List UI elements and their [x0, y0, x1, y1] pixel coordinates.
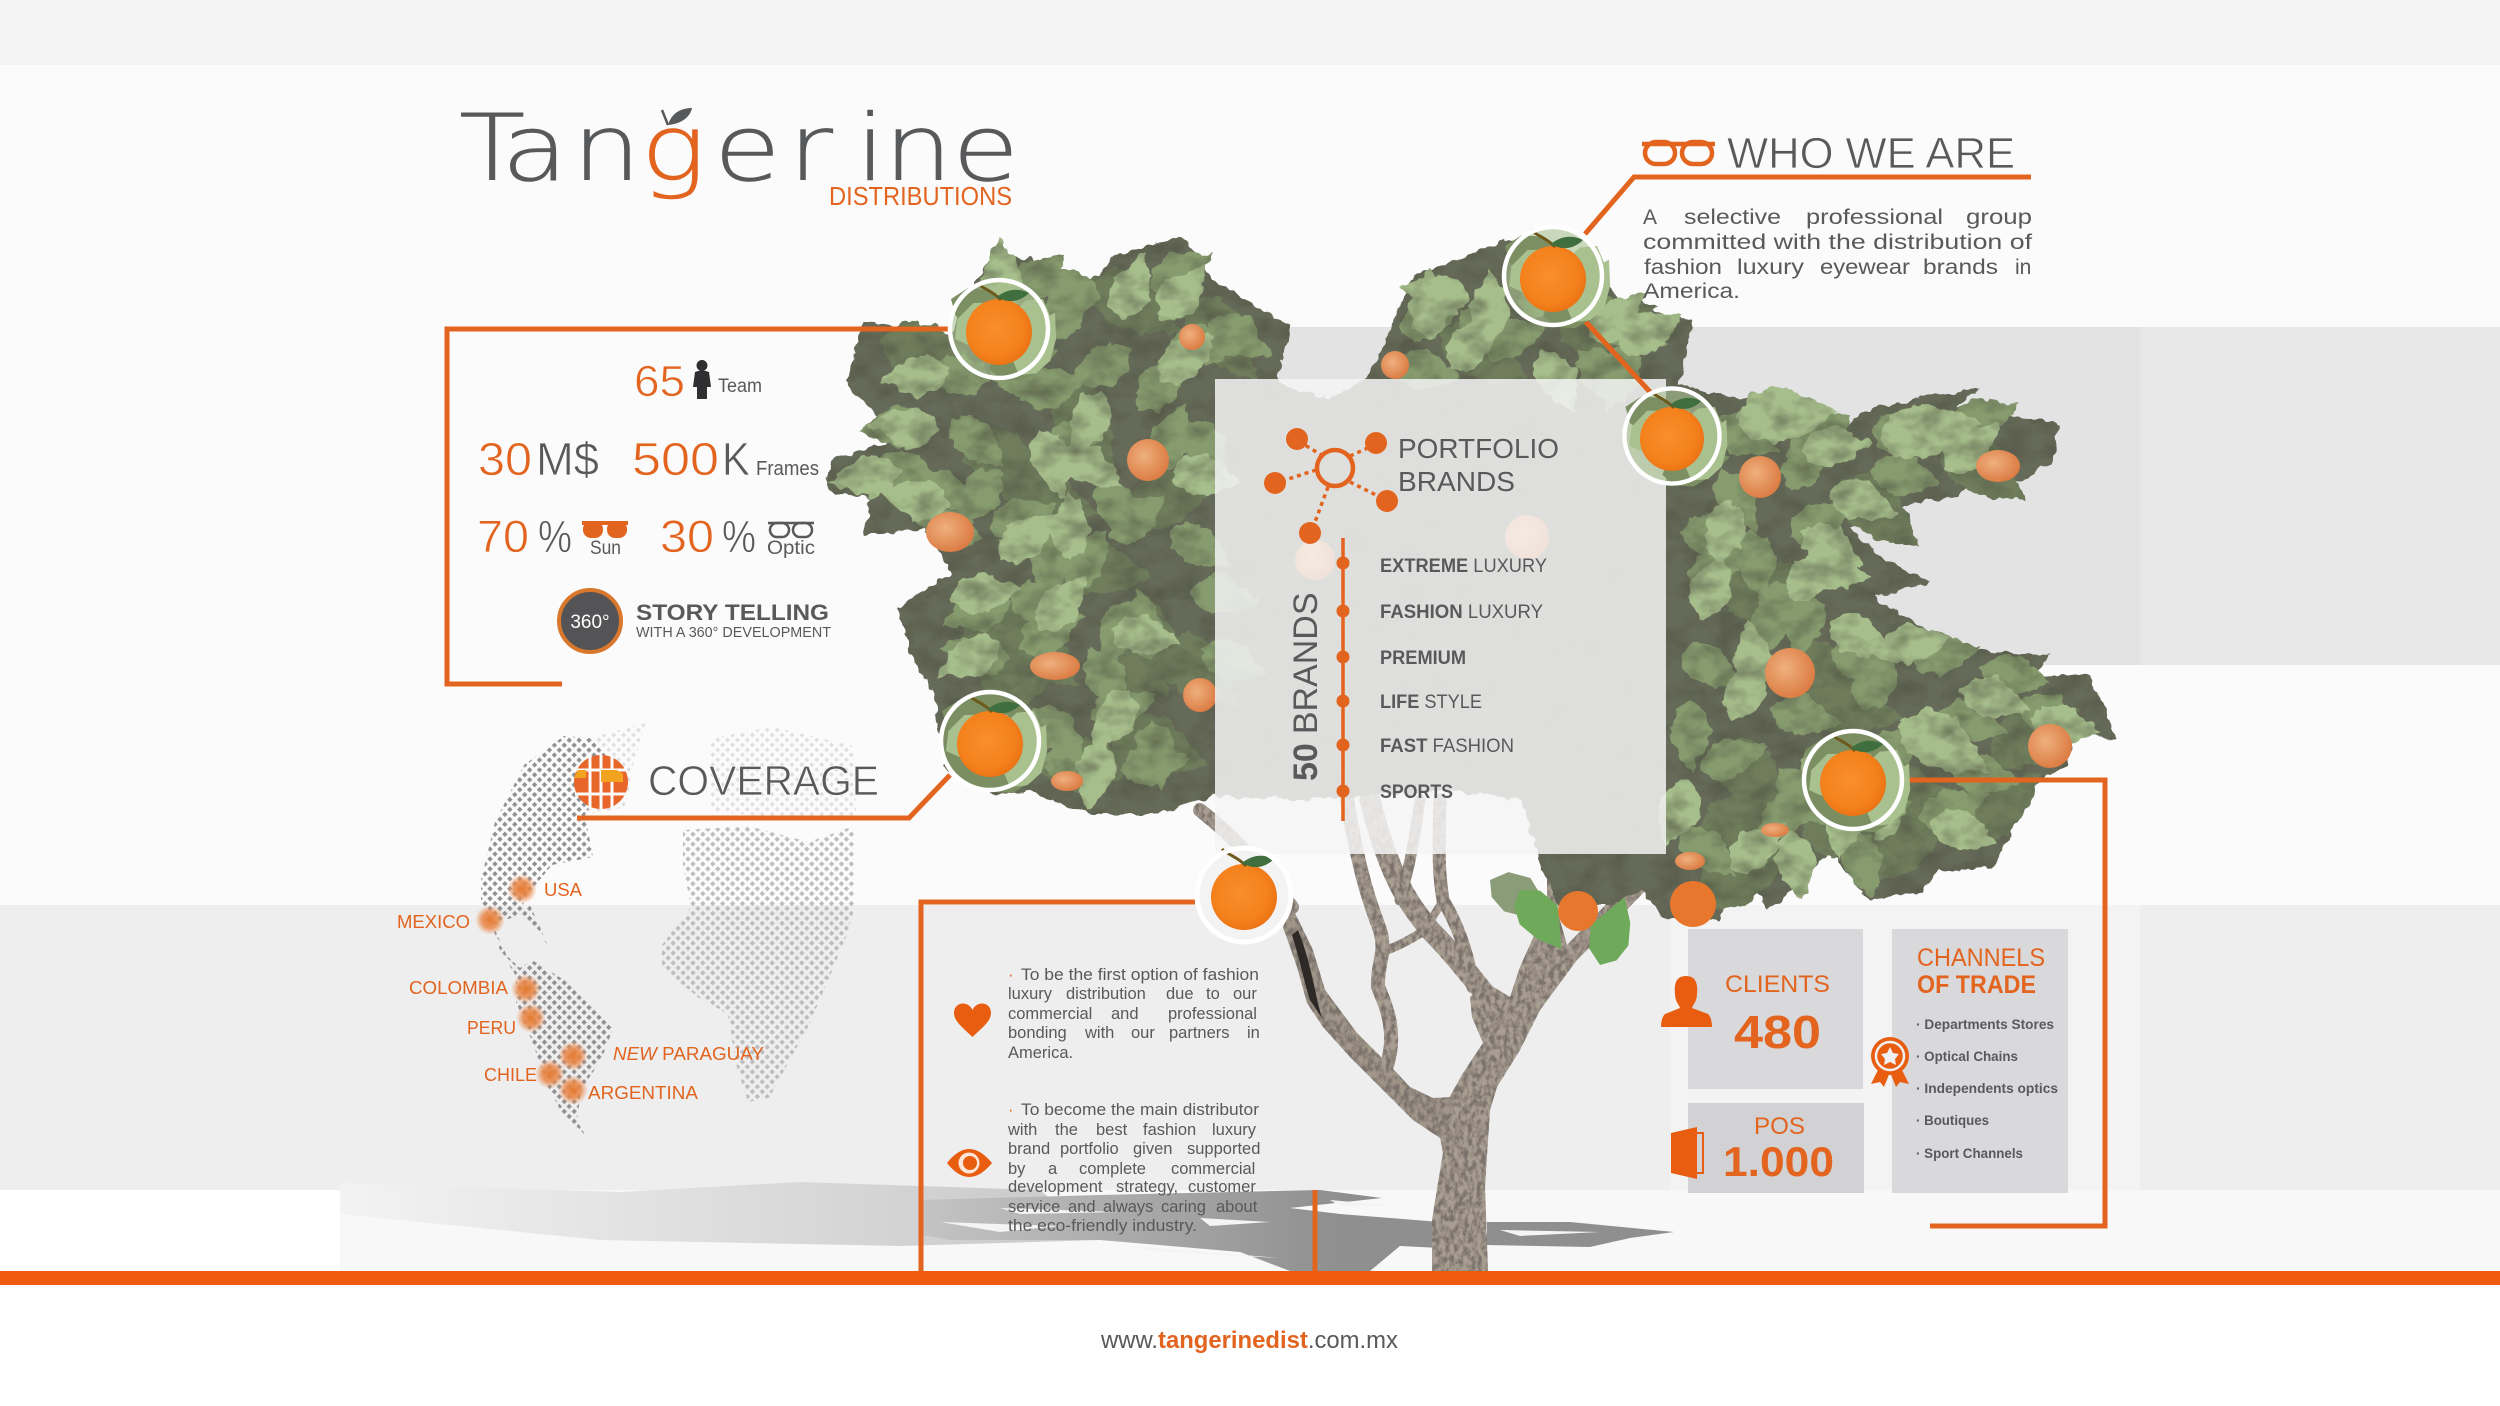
story telling badge: 360° — [570, 612, 610, 633]
icon: eye — [947, 1149, 992, 1177]
country labels: USA — [544, 879, 583, 900]
orange tree illustration — [826, 235, 2117, 1271]
who we are description: group — [1966, 206, 2032, 229]
pos box — [1688, 1103, 1864, 1193]
clients box — [1688, 929, 1863, 1089]
fruit marker: mission — [1197, 848, 1291, 942]
who we are description: America. — [1643, 280, 1740, 303]
vision text: about — [1216, 1198, 1258, 1216]
sun share stat: Sun — [590, 538, 621, 559]
channels box: · Independents optics — [1916, 1080, 2058, 1096]
country labels: COLOMBIA — [409, 977, 509, 998]
portfolio brands heading: PORTFOLIO — [1398, 433, 1559, 464]
mission text: bonding — [1008, 1024, 1067, 1042]
tree trunk and branches — [1200, 800, 1667, 1271]
vision text: service — [1008, 1198, 1060, 1216]
mission text: our — [1233, 985, 1257, 1003]
coverage heading — [574, 755, 950, 818]
clients box: 480 — [1734, 1006, 1821, 1058]
optic share stat: % — [722, 511, 756, 562]
portfolio brands heading — [1398, 433, 1559, 497]
country labels: ARGENTINA — [588, 1082, 699, 1103]
light green leaves — [826, 237, 2105, 904]
mission text: To be the first option of fashion — [1021, 966, 1259, 984]
mission text: our — [1131, 1024, 1155, 1042]
50 brands vertical label: 50BRANDS — [1287, 592, 1325, 781]
sun share stat: % — [538, 511, 572, 562]
country labels: MEXICO — [397, 911, 470, 932]
portfolio brands heading: BRANDS — [1398, 466, 1515, 497]
vision text: strategy, — [1116, 1178, 1178, 1196]
vision text: customer — [1188, 1178, 1256, 1196]
website url: www.tangerinedist.com.mx — [1100, 1327, 1398, 1354]
sun share stat: 70 — [477, 511, 529, 562]
vision text: complete — [1079, 1160, 1146, 1178]
panel: who we are — [1585, 129, 2038, 393]
who we are description: brands — [1923, 256, 1998, 279]
revenue and frames stats: Frames — [756, 458, 819, 480]
vision text: To become the main distributor — [1021, 1101, 1260, 1119]
country markers — [475, 874, 588, 1105]
portfolio hub icon — [1264, 428, 1398, 544]
orange footer bar — [0, 1271, 2500, 1285]
translucent portfolio card — [1215, 379, 1666, 854]
mid green leaves — [856, 235, 2093, 904]
vision text: luxury — [1212, 1121, 1257, 1139]
vision text: with — [1007, 1121, 1037, 1139]
lower fruits — [1558, 881, 1716, 931]
callout fruit markers — [935, 225, 1926, 942]
who we are description: fashion — [1644, 256, 1722, 279]
brand tier list — [1380, 556, 1547, 803]
mission text: commercial — [1008, 1005, 1092, 1023]
vision text: · — [1008, 1101, 1014, 1119]
vision text: best — [1096, 1121, 1128, 1139]
story telling badge: STORY TELLING — [636, 600, 829, 625]
country labels: PERU — [467, 1017, 516, 1038]
team stat: 65 — [634, 357, 685, 406]
coverage heading: COVERAGE — [648, 757, 879, 804]
brand tier list: FAST FASHION — [1380, 736, 1514, 757]
revenue and frames stats: 500 — [632, 433, 719, 485]
mission text: and — [1111, 1005, 1139, 1023]
mission text: in — [1247, 1024, 1260, 1042]
sun share stat — [477, 511, 628, 562]
channels box: · Optical Chains — [1916, 1048, 2018, 1064]
revenue and frames stats — [478, 433, 819, 485]
vision text: the — [1055, 1121, 1078, 1139]
mission text: professional — [1168, 1005, 1257, 1023]
mission text: distribution — [1066, 985, 1146, 1003]
who we are description: professional — [1806, 206, 1943, 229]
team stat — [634, 357, 762, 406]
country labels: NEW PARAGUAY — [613, 1043, 764, 1064]
icon: door — [1671, 1127, 1703, 1179]
bright green leaves under the canopy — [1480, 861, 1643, 972]
wordmark: Tangerine — [459, 95, 1019, 202]
vision text: brand — [1008, 1140, 1050, 1158]
vision text: given — [1133, 1140, 1172, 1158]
pos box: POS — [1754, 1113, 1805, 1140]
icon: client person — [1661, 976, 1712, 1027]
mission text: · — [1008, 966, 1014, 984]
vision text: portfolio — [1060, 1140, 1119, 1158]
channels box: OF TRADE — [1917, 971, 2036, 999]
who we are description: committed with the distribution of — [1643, 231, 2032, 254]
channels box: · Boutiques — [1916, 1112, 1989, 1128]
mission text: America. — [1008, 1044, 1073, 1062]
logo — [459, 95, 1019, 211]
story telling badge — [559, 590, 831, 652]
brand tier list: SPORTS — [1380, 782, 1453, 803]
country labels — [397, 879, 764, 1103]
brand tier list: EXTREME LUXURY — [1380, 556, 1547, 577]
who we are description: selective — [1684, 206, 1781, 229]
team stat: Team — [718, 376, 762, 397]
mission text: to — [1206, 985, 1220, 1003]
brand tier list: PREMIUM — [1380, 648, 1466, 669]
vision text: by — [1008, 1160, 1026, 1178]
panel: clients and channels — [1661, 780, 2105, 1226]
fruit marker: clients — [1798, 729, 1926, 839]
vision text: caring — [1161, 1198, 1206, 1216]
vision text: supported — [1187, 1140, 1260, 1158]
pos box: 1.000 — [1723, 1138, 1834, 1185]
who we are description: eyewear — [1820, 256, 1910, 279]
icon: award ribbon — [1871, 1037, 1909, 1087]
leaf on the g — [662, 108, 692, 125]
vision text: fashion — [1143, 1121, 1196, 1139]
revenue and frames stats: 30 — [478, 433, 532, 485]
who we are description: in — [2015, 256, 2031, 279]
small fruits in the canopy — [926, 324, 2072, 870]
panel: mission and vision — [921, 902, 1315, 1271]
vision text: development — [1008, 1178, 1103, 1196]
optic share stat: 30 — [660, 511, 714, 562]
brand tier timeline — [1336, 538, 1350, 821]
panel: coverage map — [397, 723, 950, 1138]
panel: company figures — [447, 329, 948, 684]
vision text: commercial — [1171, 1160, 1255, 1178]
revenue and frames stats: M$ — [536, 433, 599, 485]
country labels: CHILE — [484, 1064, 537, 1085]
vision text: a — [1048, 1160, 1058, 1178]
distributions tagline: DISTRIBUTIONS — [829, 181, 1012, 211]
revenue and frames stats: K — [722, 433, 750, 485]
who we are description: A — [1643, 206, 1657, 229]
vision text: and — [1068, 1198, 1096, 1216]
channels box — [1892, 929, 2068, 1193]
optic share stat — [660, 511, 815, 562]
clients box: CLIENTS — [1725, 971, 1830, 998]
fruit marker: who we are — [1498, 225, 1626, 335]
fruit marker: coverage — [935, 690, 1063, 800]
channels box: · Departments Stores — [1916, 1016, 2054, 1032]
mission text: luxury — [1008, 985, 1053, 1003]
channels box: · Sport Channels — [1916, 1145, 2023, 1161]
who we are description: luxury — [1737, 256, 1805, 279]
fruit marker: portfolio — [1619, 387, 1743, 494]
channels box: CHANNELS — [1917, 944, 2045, 972]
story telling badge: WITH A 360° DEVELOPMENT — [636, 625, 831, 641]
mission text: with — [1084, 1024, 1114, 1042]
vision text: the eco-friendly industry. — [1008, 1217, 1197, 1235]
dotted world map — [481, 723, 856, 1138]
icon: heart — [954, 1004, 991, 1037]
dark shaded branch side — [1292, 930, 1322, 1018]
mission text: due — [1166, 985, 1194, 1003]
ground shadow of tree — [340, 1182, 1674, 1271]
mission text: partners — [1169, 1024, 1230, 1042]
icon: glasses — [1642, 142, 1715, 164]
foliage — [826, 235, 2117, 923]
who we are heading: WHO WE ARE — [1727, 129, 2015, 178]
fruit marker: figures — [944, 278, 1072, 388]
brand tier list: LIFE STYLE — [1380, 692, 1482, 713]
brand tier list: FASHION LUXURY — [1380, 602, 1543, 623]
optic share stat: Optic — [767, 538, 815, 559]
vision text: always — [1103, 1198, 1153, 1216]
foliage mass — [827, 236, 2117, 920]
dark olive leaves — [873, 254, 2094, 923]
